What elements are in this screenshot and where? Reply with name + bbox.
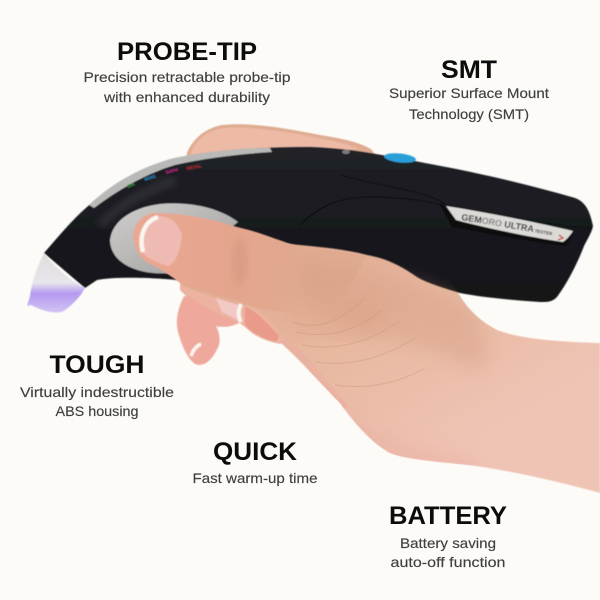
description: battery: auto-off function [390,554,506,570]
thumb [133,213,367,320]
grey top strip [89,148,272,208]
LED labels: MOIS [144,174,156,182]
grey thumb oval [110,203,238,273]
description: tough [20,384,174,419]
description: smt: Technology (SMT) [409,106,529,122]
hand and forearm [177,124,600,493]
thumb nail [140,216,182,266]
heading: quick: QUICK [213,438,297,466]
callout: smt [389,56,549,122]
heading: probe-tip: PROBE-TIP [117,38,257,66]
callout: battery [389,502,507,570]
finger tip [245,307,279,342]
probe tip [27,253,85,313]
description: quick: Fast warm-up time [192,470,318,486]
description: tough: Virtually indestructible [20,384,174,400]
device top highlight [100,180,175,225]
fingernail: curled finger [191,344,201,356]
thumb knuckle shadow [232,238,248,286]
middle finger [180,284,286,344]
LED labels [127,163,202,189]
blue button [384,152,416,164]
curled finger [177,296,240,365]
callout: quick [192,438,318,486]
callout: probe-tip [84,38,291,105]
back of hand highlight [190,128,360,156]
LED labels: DIA [127,181,136,189]
small indicator [342,150,350,154]
LED labels: SAPH [165,167,178,175]
callout: tough [20,351,174,419]
description: smt: Superior Surface Mount [389,85,549,101]
LED labels: METAL [186,163,202,171]
device body [44,147,593,302]
heading: tough: TOUGH [50,351,144,379]
body seam [300,175,445,225]
heading: battery: BATTERY [389,502,507,530]
description: battery: Battery saving [400,535,496,551]
description: probe-tip: Precision retractable probe-tip [84,69,291,85]
fingernail: middle finger [216,298,238,320]
heading: smt: SMT [441,56,497,84]
description: tough: ABS housing [56,403,138,419]
upper edge seam [445,205,592,228]
description: probe-tip: with enhanced durability [103,89,270,105]
palm shading and creases [282,272,486,466]
photo: hand holding gem tester [27,124,600,493]
description: probe-tip [84,69,291,105]
ultra tester badge: GEMORO ULTRA TESTER [461,212,554,237]
gem tester device [27,147,593,313]
description: battery [390,535,506,570]
thumb nail white tip [142,217,158,252]
description: smt [389,85,549,122]
ultra tester badge [440,205,575,246]
